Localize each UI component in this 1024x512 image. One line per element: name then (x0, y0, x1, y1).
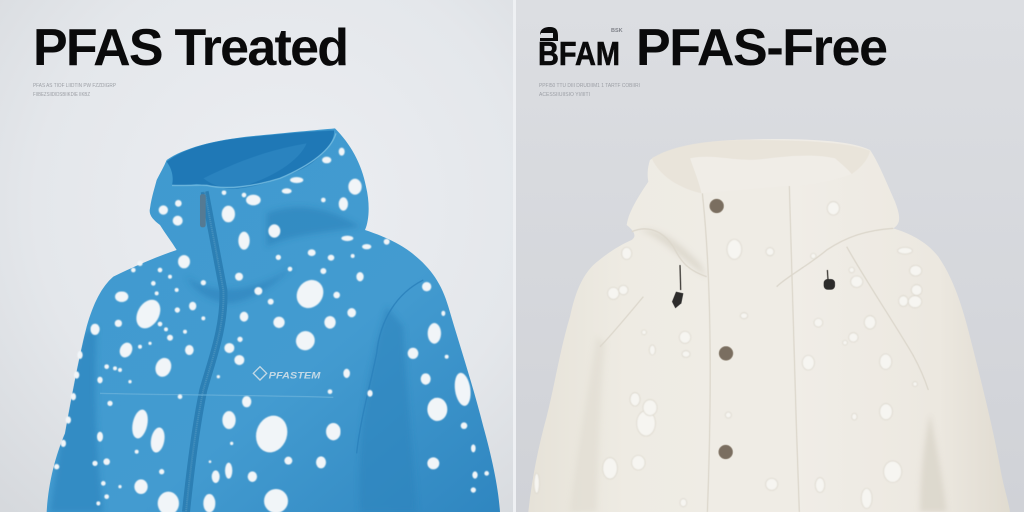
zipper (186, 192, 223, 512)
panel background left (0, 0, 513, 512)
placket (702, 186, 799, 512)
buttons (710, 199, 733, 459)
jacket body and hood (47, 128, 500, 512)
placket seams (702, 186, 799, 512)
drawcord right (824, 270, 835, 290)
inner hood lining (652, 140, 870, 193)
logo diamond icon (253, 367, 267, 380)
hood edge (632, 228, 893, 287)
caption text left: PFAS AS TIOF LIIDTIN PW FZZDIGRP (33, 83, 116, 89)
collar (690, 156, 852, 194)
chest logo (253, 367, 321, 381)
toggle left (672, 292, 683, 308)
caption text right: ACESSIIUIISIO YI/IIITI (539, 92, 590, 98)
heading: PFAS-Free: PFAS-Free (636, 19, 888, 77)
inner hood shadow (203, 143, 307, 188)
logo: BFAM (538, 27, 620, 72)
zipper teeth (186, 192, 223, 512)
heading: PFAS Treated: PFAS Treated (33, 19, 349, 77)
water droplets (54, 148, 489, 512)
logo letters: BFAM (538, 35, 620, 72)
divider line (513, 0, 516, 512)
underarm shading (570, 230, 947, 512)
jacket body and hood (528, 139, 1010, 512)
cord right (825, 270, 830, 280)
panel: PFAS-free (516, 0, 1024, 512)
logo hook (540, 27, 558, 41)
panel background right (516, 0, 1024, 512)
caption text right: PPFI50 TTU DIII DRUDIIM1 1 TARTF COBIIRI (539, 83, 640, 89)
blue treated jacket (47, 128, 500, 512)
body shading (50, 207, 417, 512)
toggle right (824, 279, 835, 290)
hood rim seam (172, 133, 336, 187)
logo text: PFASTEM (269, 371, 321, 381)
cream PFAS-free jacket (528, 139, 1010, 512)
caption text left: FIIBEZSIIDIDSBIIKDIE IIKBZ (33, 92, 90, 98)
yoke seam (100, 393, 333, 397)
caption text left (33, 83, 116, 98)
raglan seams (600, 247, 928, 390)
small logo mark: BSK (611, 28, 623, 34)
water droplets (534, 202, 922, 508)
sleeve seam (357, 280, 423, 453)
zipper pull (200, 194, 206, 227)
inner hood lining (167, 131, 334, 189)
caption text right (539, 83, 640, 98)
drawcord left (672, 265, 683, 308)
panel: PFAS treated (0, 0, 513, 512)
cord left (678, 265, 683, 290)
